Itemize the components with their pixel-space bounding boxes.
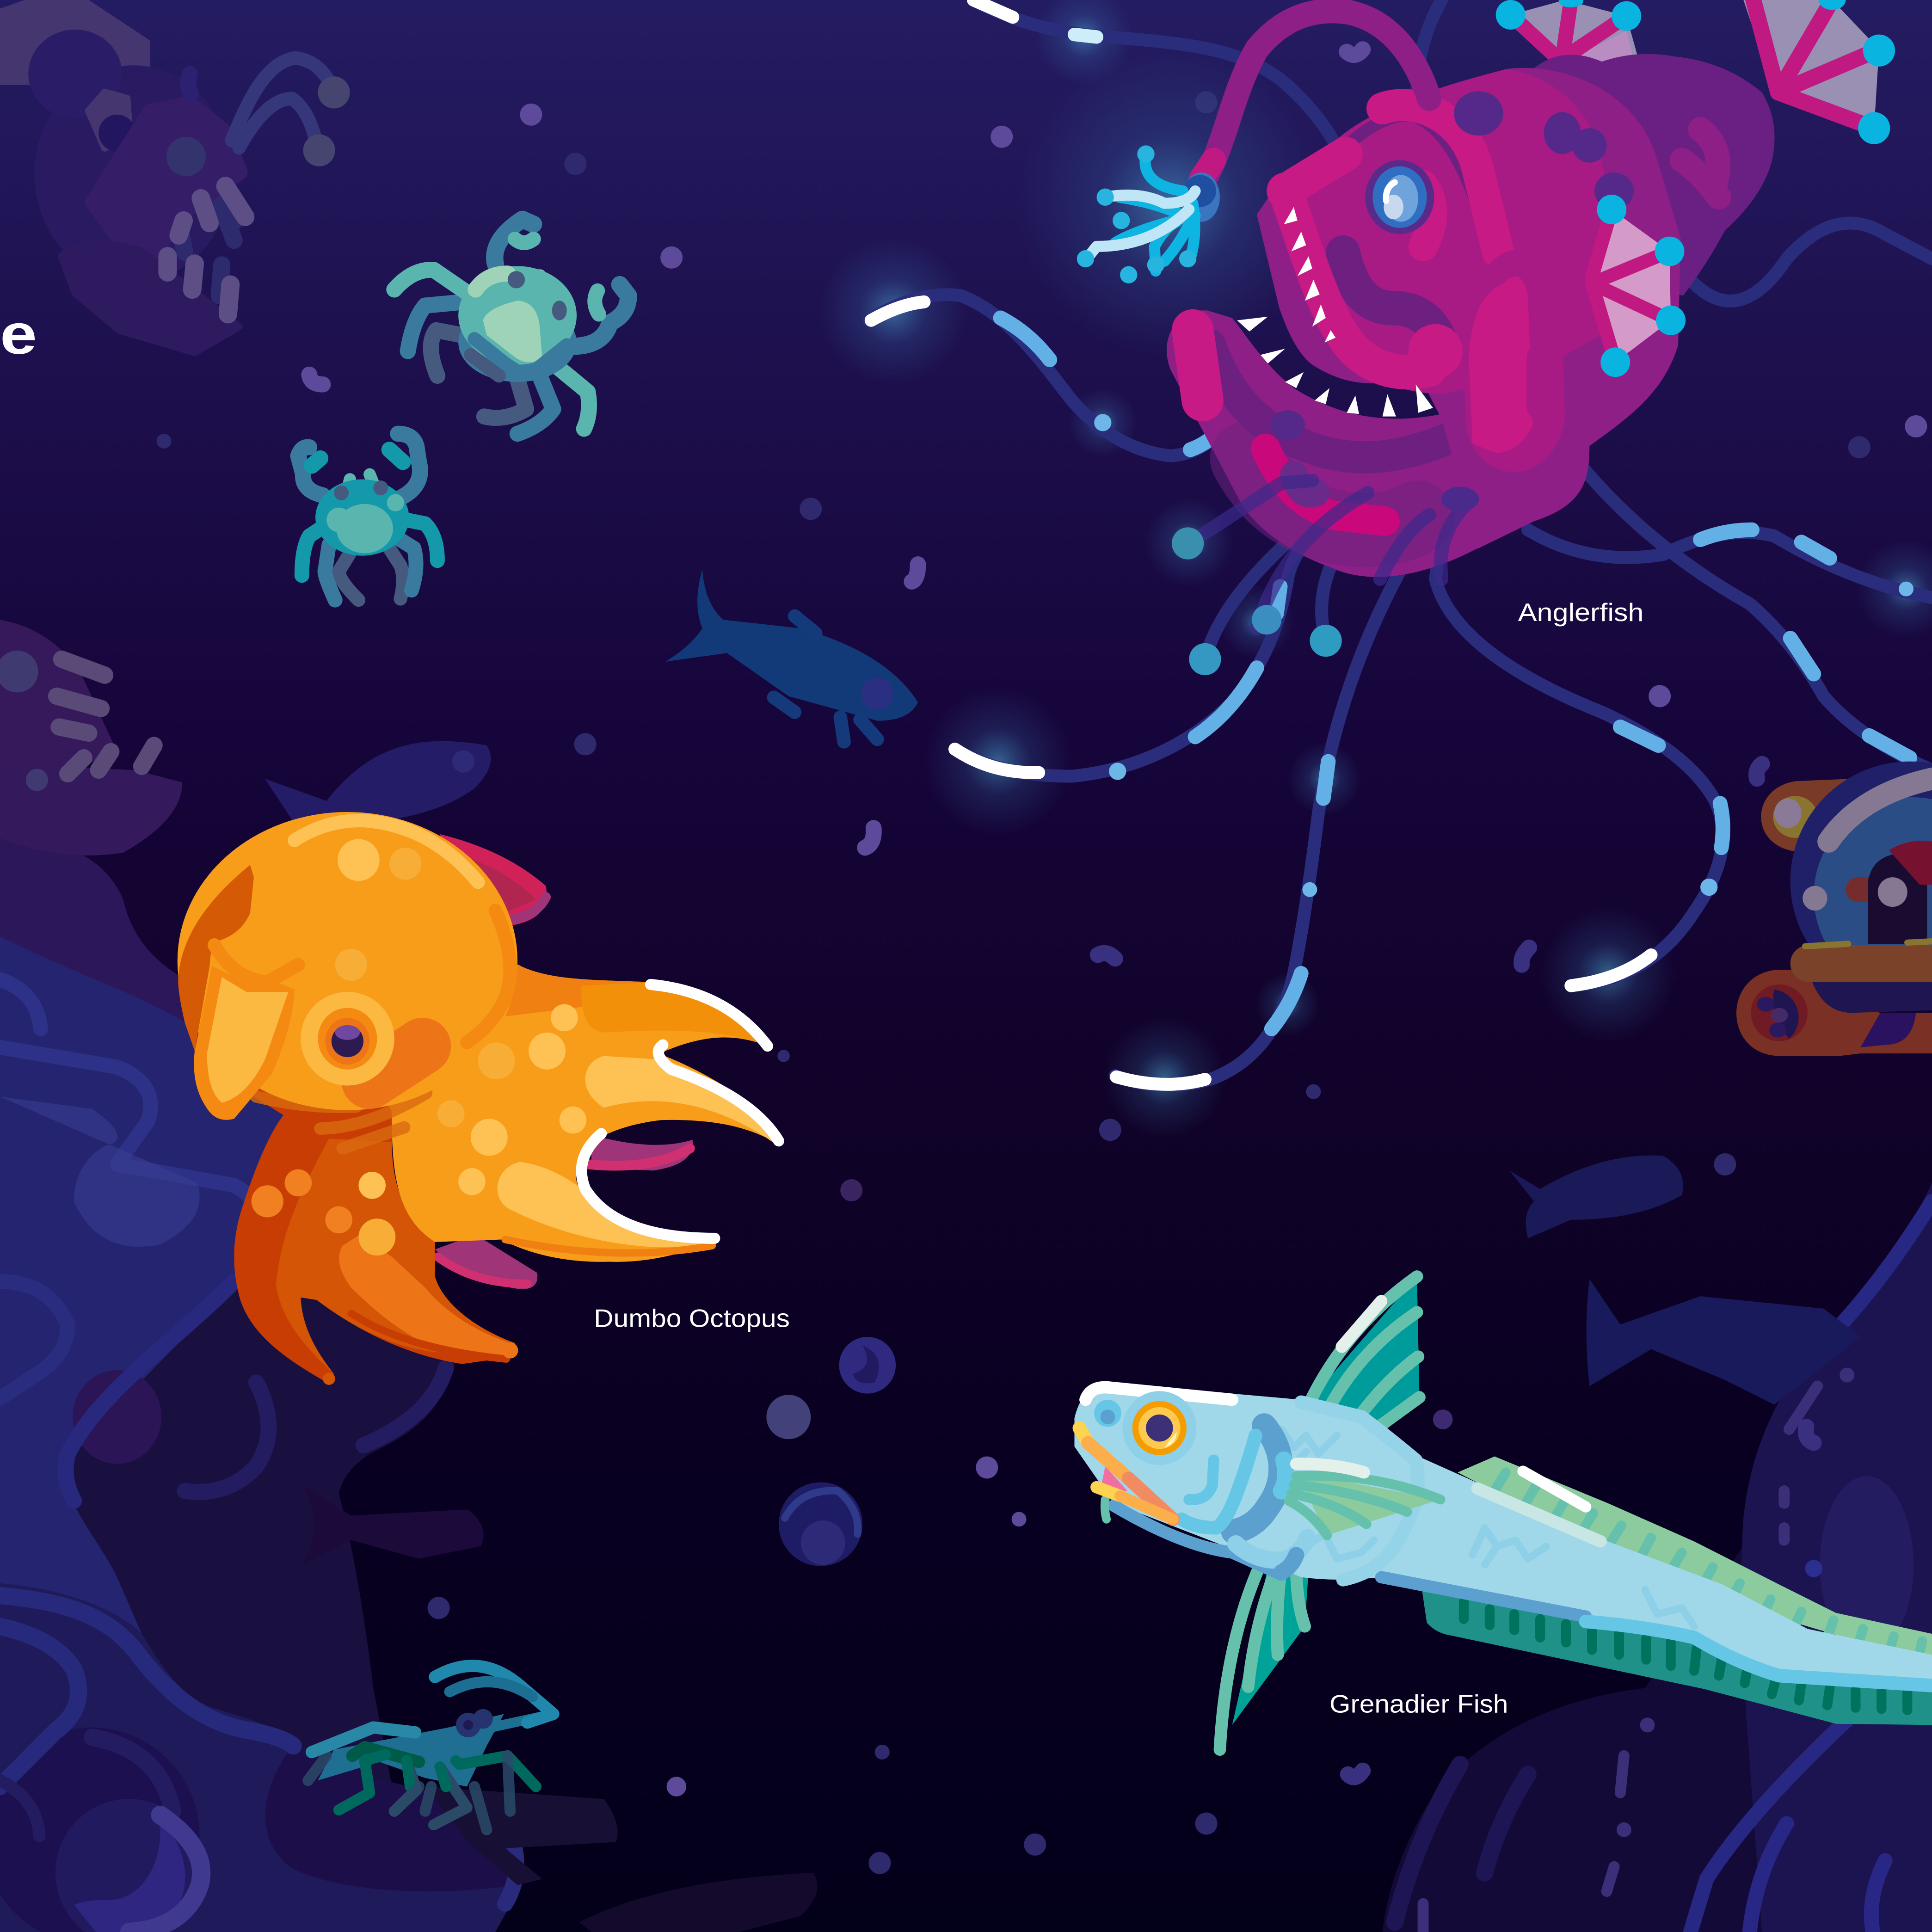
grenadier body	[1074, 1383, 1932, 1683]
anglerfish side fin	[1592, 195, 1686, 377]
anglerfish dorsal fin left	[1496, 0, 1660, 97]
octopus white highlights	[582, 984, 779, 1238]
anglerfish pectoral lobe	[1463, 249, 1565, 472]
grenadier lower fin	[1422, 1589, 1932, 1725]
ghost anglerfish top left	[0, 0, 350, 352]
grenadier head and gills	[1181, 1426, 1307, 1572]
grenadier mouth	[1079, 1428, 1173, 1519]
crab small	[298, 434, 437, 600]
grenadier fish	[1074, 1276, 1932, 1750]
right rock formations	[1383, 1183, 1932, 1932]
octopus left flap	[194, 945, 298, 1120]
octopus eye	[301, 992, 394, 1085]
grenadier upper fin	[1458, 1456, 1932, 1663]
label anglerfish: Anglerfish	[1518, 598, 1643, 627]
anglerfish back hump	[1528, 54, 1775, 295]
anglerfish tentacles	[869, 0, 1932, 1086]
grenadier dorsal fin	[1312, 1276, 1420, 1427]
grenadier pectoral fin	[1289, 1464, 1440, 1535]
fish silhouette blue	[665, 569, 918, 742]
ghost anglerfish lower left	[0, 620, 182, 855]
anglerfish mottling	[1270, 91, 1634, 440]
anglerfish lure	[1077, 145, 1220, 283]
anglerfish illicium rod	[1205, 11, 1429, 178]
anglerfish eye	[1365, 160, 1434, 234]
bubble shell bottom left	[55, 1799, 203, 1932]
submersible	[1736, 762, 1932, 1056]
octopus ear	[440, 834, 547, 925]
grenadier lower fin rays	[1464, 1602, 1907, 1710]
grenadier nostril	[1094, 1400, 1121, 1427]
grenadier white brow	[1085, 1387, 1232, 1400]
label dumbo octopus: Dumbo Octopus	[594, 1304, 790, 1333]
crab large	[394, 219, 628, 434]
octopus neck	[254, 1031, 392, 1142]
grenadier eye	[1122, 1391, 1196, 1465]
octopus arm spots	[252, 1004, 586, 1255]
octopus head spots	[335, 839, 421, 981]
octopus head	[178, 812, 517, 1110]
anglerfish upper lip	[1285, 154, 1429, 372]
label grenadier fish: Grenadier Fish	[1329, 1690, 1508, 1718]
grenadier upper fin rays	[1495, 1472, 1922, 1657]
anglerfish dorsal fin right	[1743, 0, 1895, 144]
octopus main arms	[369, 965, 779, 1262]
anglerfish body and head	[1257, 68, 1680, 548]
anglerfish	[1167, 0, 1895, 675]
glows of lure lights	[819, 0, 1932, 1140]
dumbo octopus	[178, 812, 779, 1385]
anglerfish lower jaw	[1167, 310, 1589, 577]
background fish silhouettes	[265, 741, 1860, 1932]
anglerfish translucent tentacle roots	[1189, 480, 1472, 628]
octopus cheek	[369, 1046, 423, 1081]
grenadier scale marks	[1281, 1429, 1694, 1626]
octopus rear arm	[234, 1096, 515, 1384]
left rock formations	[0, 838, 529, 1932]
grenadier ventral fin	[1220, 1559, 1309, 1750]
anglerfish teeth	[1237, 207, 1433, 417]
shrimp	[308, 1666, 553, 1830]
octopus lower fins	[591, 1135, 693, 1170]
